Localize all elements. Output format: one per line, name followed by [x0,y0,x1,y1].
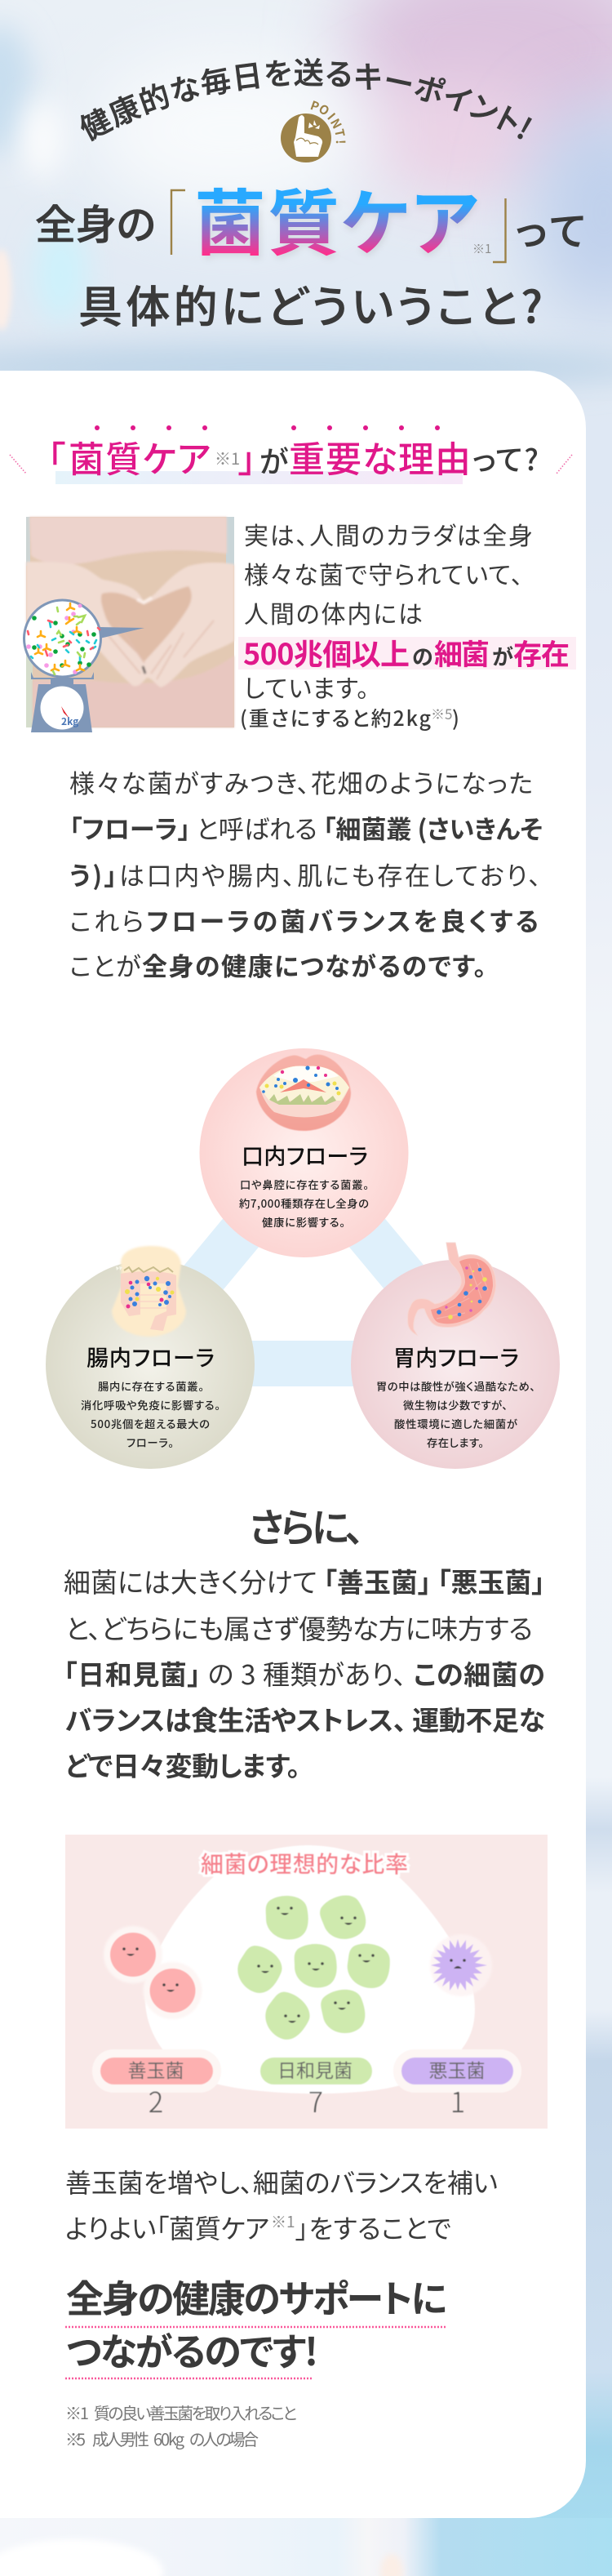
diagram: three floras [46,1048,560,1469]
icon: scale with bacteria magnifier [24,600,144,732]
gastric flora: 微生物は少数ですが、 [403,1397,508,1413]
label pills and ratios: 悪玉菌 [429,2055,485,2083]
chart: ideal bacteria ratio [65,1835,548,2129]
oral flora [199,1048,408,1257]
footnotes: 質の良い善玉菌を取り入れること [94,2400,297,2424]
text: three bacteria types: と、どちらにも属さず優勢な方に味方する [65,1608,533,1647]
text: intro beside photo: ) [452,703,459,732]
icon: intestine [112,1246,186,1337]
label pills and ratios: 善玉菌 [127,2055,184,2083]
text: intro beside photo [238,516,576,732]
icon: point hand badge: N [326,116,346,131]
conclusion [65,2270,447,2378]
footnotes: ※5 [65,2427,86,2450]
label pills and ratios [92,2049,521,2120]
text: intro beside photo: 500兆個以上 [243,631,410,674]
title [35,167,586,336]
text: intro beside photo: 実は、人間のカラダは全身 [244,516,533,552]
white content card [0,371,586,2518]
heading: furthermore: さらに、 [249,1496,365,1553]
text: flora explanation: これらフローラの菌バランスを良くする [69,901,539,938]
section heading: って? [472,437,539,479]
neutral bacteria [229,1890,393,2047]
text: increase good bacteria: 善玉菌を増やし、細菌のバランスを補い [65,2163,498,2200]
title: 菌質ケア [197,170,478,274]
intestinal flora [46,1246,255,1469]
text: increase good bacteria: 」をすることで [295,2209,451,2246]
chart title: 細菌の理想的な比率 [201,1847,408,1880]
intestinal flora: 腸内フローラ [86,1341,215,1373]
icon: stomach [408,1243,496,1335]
label pills and ratios: 日和見菌 [277,2055,353,2083]
footnotes: 成人男性 [92,2427,149,2450]
gastric flora [351,1243,560,1469]
icon: point hand badge: ! [332,140,349,145]
label pills and ratios: 7 [308,2080,323,2120]
text: flora explanation: 様々な菌がすみつき、花畑のようになった [69,763,533,800]
conclusion: 全身の健康のサポートに [66,2270,447,2324]
footnotes: 60kg [153,2427,184,2450]
text: intro beside photo: しています。 [244,669,369,705]
gastric flora: 酸性環境に適した細菌が [394,1416,517,1431]
text: flora explanation: 「フローラ」 と呼ばれる 「細菌叢 (さいきんそ [69,809,543,846]
text: flora explanation: う)」は口内や腸内、肌にも存在しており、 [69,856,541,892]
label pills and ratios: 1 [450,2080,465,2120]
title: って [516,199,586,256]
text: intro beside photo: (重さにすると約2kg [240,703,432,732]
text: flora explanation: ことが全身の健康につながるのです。 [69,946,486,983]
icon: scale with bacteria magnifier: 2kg [61,714,78,728]
title: ※1 [472,240,491,257]
intestinal flora: 500兆個を超える最大の [91,1416,210,1431]
text: intro beside photo: 細菌 [434,632,490,674]
text: intro beside photo: 存在 [513,632,570,674]
footnotes: ※1 [65,2400,89,2424]
hero: arched kicker text: 健康的な毎日を送るキーポイント! [81,57,532,142]
text: intro beside photo: 人間の体内には [244,594,423,630]
icon: point hand badge: T [330,127,349,139]
oral flora: 口や鼻腔に存在する菌叢。 [240,1177,369,1192]
conclusion: つながるのです! [66,2323,318,2377]
section heading: が [259,438,289,481]
bacteria confetti [26,603,100,674]
text: three bacteria types: 細菌には大きく分けて 「善玉菌」 「悪玉菌」 [64,1561,545,1600]
text: three bacteria types: どで日々変動します。 [65,1745,300,1784]
section heading: 」 [238,430,256,483]
good bacteria [104,1926,202,2019]
text: flora explanation [69,763,543,983]
bad bacteria [430,1934,492,1996]
section heading: 重要な理由 [289,430,471,483]
photo: hands forming a heart over the belly [26,517,234,727]
oral flora: 健康に影響する。 [262,1214,345,1230]
section heading: 菌質ケア [69,430,211,483]
intestinal flora: 消化呼吸や免疫に影響する。 [81,1397,220,1413]
oral flora: 口内フローラ [242,1139,368,1171]
section heading: ※1 [215,446,240,469]
icon: point hand badge: I [324,109,339,123]
text: intro beside photo: ※5 [431,703,452,723]
text: intro beside photo: の [412,641,433,671]
icon: point hand badge: P [308,96,322,115]
oral flora: 約7,000種類存在し全身の [239,1195,369,1211]
icon: point hand badge [281,96,349,162]
gastric flora: 胃の中は酸性が強く過酷なため、 [376,1378,535,1394]
text: three bacteria types [64,1561,545,1784]
intestinal flora: フローラ。 [126,1435,174,1450]
label pills and ratios: 2 [149,2080,163,2120]
text: intro beside photo: が [492,641,513,671]
footnotes: の人の場合 [189,2427,259,2450]
text: increase good bacteria: よりよい「菌質ケア [65,2209,269,2246]
intestinal flora: 腸内に存在する菌叢。 [98,1378,204,1394]
title: 全身の [35,193,156,251]
text: increase good bacteria: ※1 [271,2210,295,2232]
text: increase good bacteria [65,2163,498,2246]
title: 具体的にどういうこと? [78,271,543,336]
gastric flora: 存在します。 [427,1435,484,1450]
title: 菌質ケア [194,167,478,270]
text: three bacteria types: 「日和見菌」 の 3 種類があり、 この細菌の [64,1653,545,1693]
text: intro beside photo: 様々な菌で守られていて、 [244,555,523,591]
text: three bacteria types: バランスは食生活やストレス、 運動不足な [65,1699,545,1738]
gastric flora: 胃内フローラ [393,1341,519,1373]
section heading: 「 [47,430,65,483]
section heading [10,425,572,484]
icon: mouth [256,1055,351,1131]
footnotes [65,2400,297,2450]
icon: point hand badge: O [315,100,333,119]
